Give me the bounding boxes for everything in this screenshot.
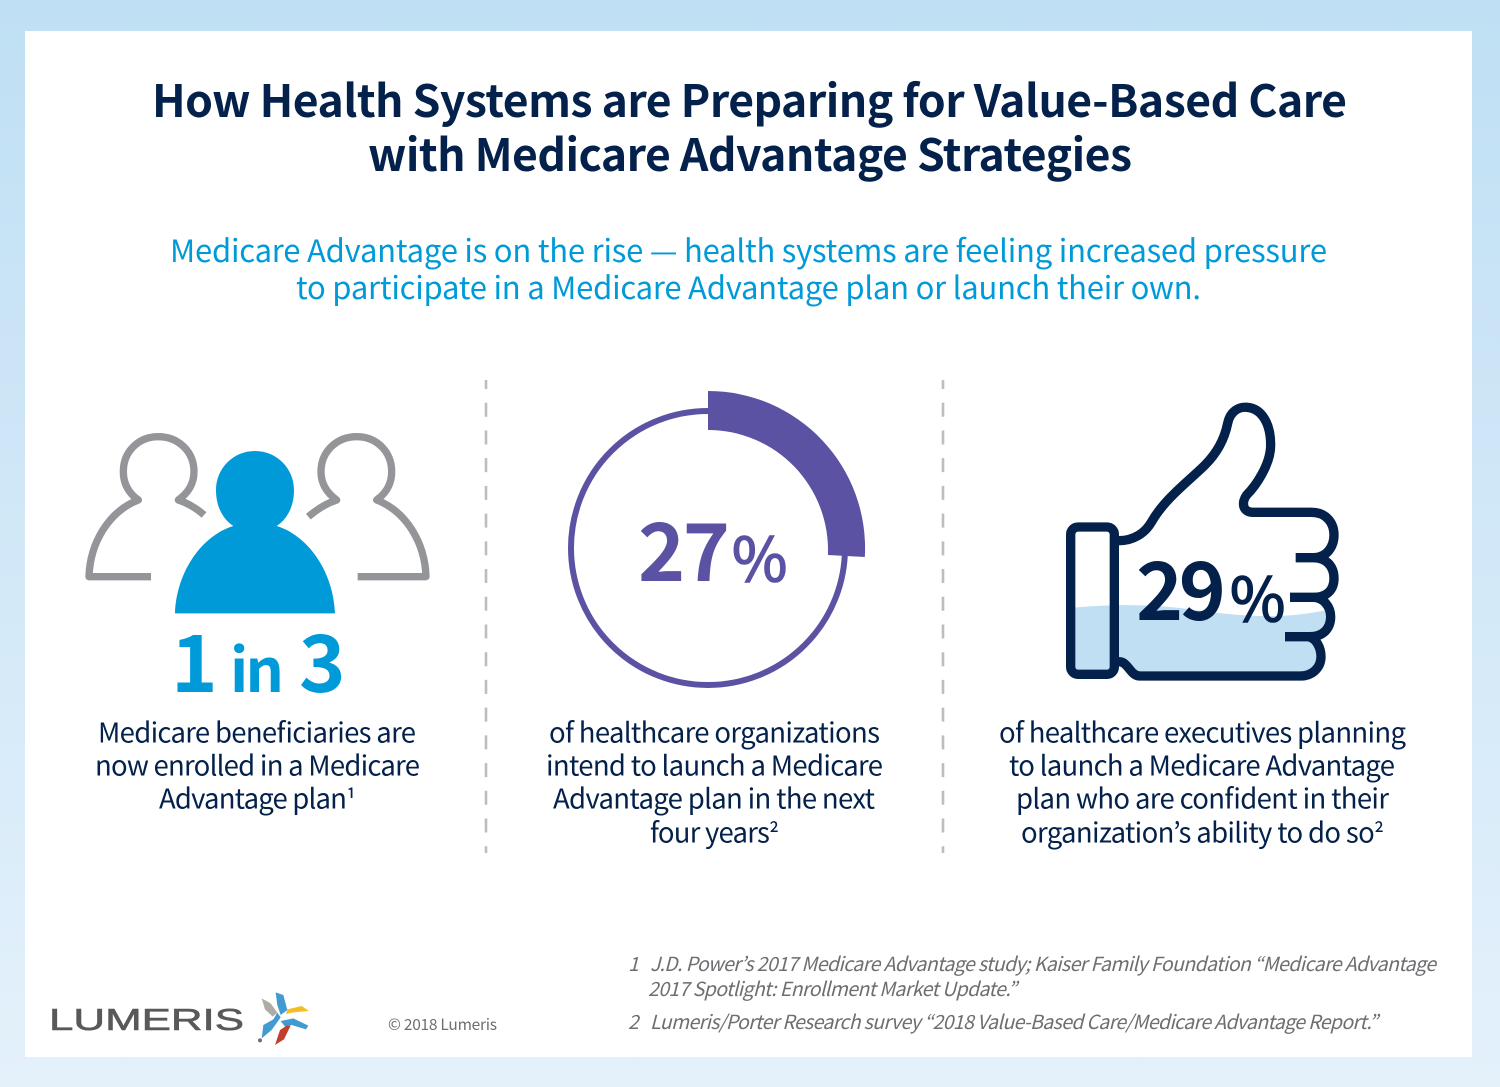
- icon: thumbs up: [1071, 407, 1334, 676]
- text: column 2: intend to launch a Medicare: [546, 743, 883, 783]
- divider right: [942, 380, 944, 853]
- icon: center blue person: [175, 451, 335, 613]
- text: column 3: ²: [1374, 814, 1384, 849]
- stat: 1 in 3: 1: [171, 600, 218, 715]
- title: with Medicare Advantage Strategies: [368, 119, 1132, 184]
- stat: 1 in 3: [171, 600, 346, 715]
- subtitle: Medicare Advantage is on the rise — health systems are feeling increased pressure: [170, 226, 1327, 271]
- stat: 27%: 27: [638, 489, 730, 605]
- stat: 1 in 3: in: [230, 623, 284, 710]
- footnotes: [628, 948, 1438, 1035]
- text: column 1: now enrolled in a Medicare: [95, 743, 420, 783]
- text: column 2: of healthcare organizations: [549, 710, 880, 750]
- text: column 1: ¹: [346, 780, 356, 815]
- text: column 3: [999, 710, 1406, 850]
- thumb cuff: [1071, 527, 1114, 674]
- stat: 29%: %: [1230, 552, 1285, 639]
- text: column 3: to launch a Medicare Advantage: [1009, 743, 1395, 783]
- text: column 3: of healthcare executives planning: [999, 710, 1406, 750]
- text: column 2: [546, 710, 883, 850]
- stat: 1 in 3: 3: [299, 600, 346, 715]
- stat: 27%: [638, 489, 787, 605]
- text: column 2: Advantage plan in the next: [553, 776, 875, 816]
- logo star: [258, 992, 309, 1045]
- stat: 29%: 29: [1136, 528, 1226, 644]
- divider left: [485, 380, 487, 853]
- footnotes: 1: [628, 948, 639, 977]
- text: column 3: plan who are confident in their: [1016, 776, 1389, 816]
- thumb outline: [1119, 407, 1334, 676]
- icon: right grey person: [308, 437, 426, 577]
- footnotes: Lumeris/Porter Research survey “2018 Value-Based Care/Medicare Advantage Report.”: [650, 1006, 1381, 1035]
- text: column 1: Medicare beneficiaries are: [98, 710, 416, 750]
- footnotes: J.D. Power’s 2017 Medicare Advantage study; Kaiser Family Foundation “Medicare Advantage: [650, 948, 1438, 977]
- text: column 2: ²: [769, 814, 779, 849]
- logo: Lumeris: [49, 992, 309, 1045]
- thumb fill level: [1071, 605, 1328, 676]
- subtitle: to participate in a Medicare Advantage plan or launch their own.: [296, 263, 1201, 308]
- title: How Health Systems are Preparing for Value-Based Care: [152, 65, 1347, 130]
- footnotes: 2: [628, 1006, 641, 1035]
- stat: 29%: [1136, 528, 1285, 644]
- logo wordmark: LUMERIS: [49, 1002, 244, 1037]
- icon: three people: [89, 437, 426, 613]
- title: [152, 65, 1347, 184]
- copyright: © 2018 Lumeris: [388, 1013, 497, 1035]
- chart: 27% donut: [571, 391, 865, 685]
- text: column 1: [95, 710, 420, 816]
- text: column 3: organization’s ability to do so: [1021, 810, 1375, 850]
- subtitle: [170, 226, 1327, 308]
- icon: left grey person: [89, 437, 204, 577]
- stat: 27%: %: [732, 512, 787, 599]
- footnotes: 2017 Spotlight: Enrollment Market Update.”: [648, 973, 1020, 1002]
- text: column 2: four years: [650, 810, 770, 850]
- text: column 1: Advantage plan: [159, 776, 347, 816]
